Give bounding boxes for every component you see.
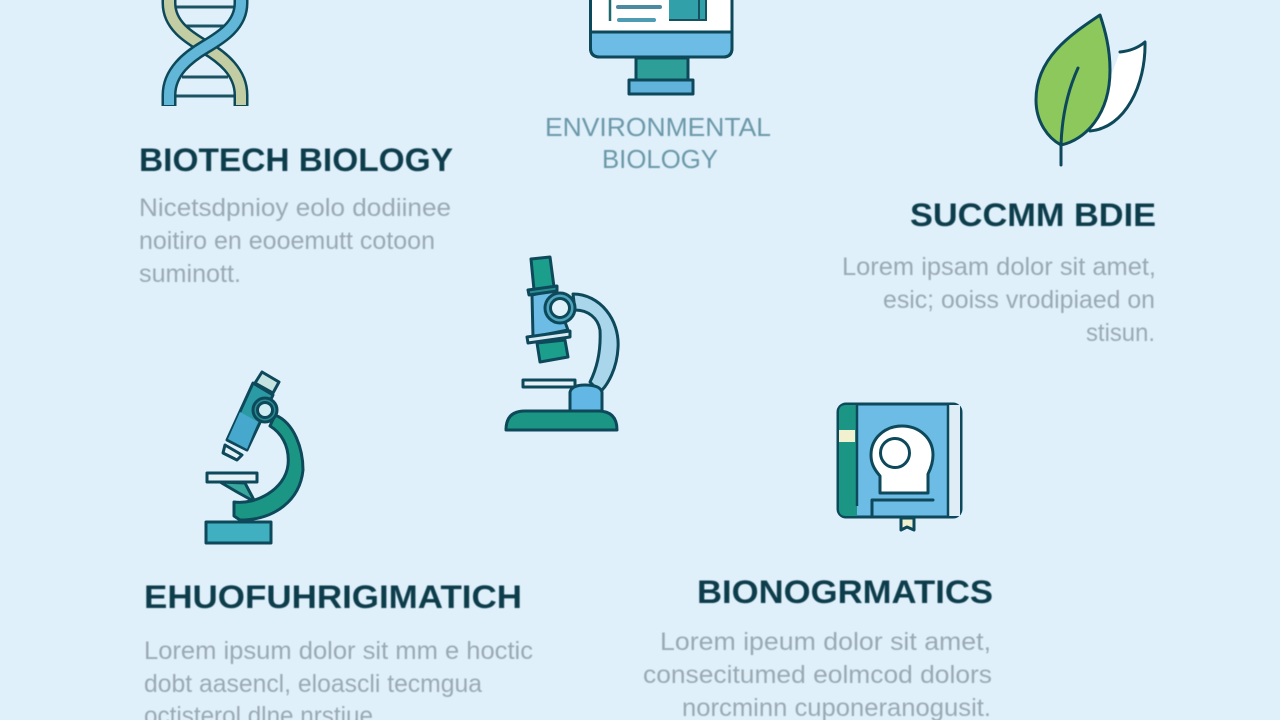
text block: ehuofuhrigimatich description: dobt aasencl, eloascli tecmgua bbox=[144, 670, 482, 698]
text block: succmm description: stisun. bbox=[1086, 319, 1155, 347]
text block: biotech description bbox=[139, 194, 451, 288]
icon: DNA helix bbox=[169, 0, 241, 106]
icon: left microscope bbox=[206, 372, 303, 543]
heading: succmm bdie: SUCCMM BDIE bbox=[910, 197, 1156, 233]
text block: biotech description: suminott. bbox=[139, 260, 241, 288]
icon: centre microscope bbox=[506, 257, 618, 430]
text block: succmm description: esic; ooiss vrodipiaed on bbox=[883, 286, 1155, 314]
text block: bionogrmatics description bbox=[643, 628, 992, 720]
text block: bionogrmatics description: consecitumed eolmcod dolors bbox=[643, 661, 992, 689]
heading: biotech biology: BIOTECH BIOLOGY bbox=[139, 142, 453, 178]
text block: ehuofuhrigimatich description bbox=[144, 637, 533, 720]
text block: bionogrmatics description: Lorem ipeum dolor sit amet, bbox=[660, 628, 991, 656]
icon: leaf bbox=[1036, 15, 1145, 165]
text block: ehuofuhrigimatich description: Lorem ipsum dolor sit mm e hoctic bbox=[144, 637, 533, 665]
heading: environmental biology: BIOLOGY bbox=[602, 144, 718, 174]
heading: environmental biology: ENVIRONMENTAL bbox=[545, 112, 771, 142]
heading: environmental biology bbox=[545, 112, 771, 174]
text block: succmm description: Lorem ipsam dolor sit amet, bbox=[842, 253, 1156, 281]
heading: bionogrmatics: BIONOGRMATICS bbox=[697, 574, 993, 610]
heading: ehuofuhrigimatich: EHUOFUHRIGIMATICH bbox=[144, 579, 522, 615]
icon: computer monitor bbox=[590, 0, 732, 94]
text block: succmm description bbox=[842, 253, 1156, 347]
text block: biotech description: Nicetsdpnioy eolo dodiinee bbox=[139, 194, 451, 222]
text block: biotech description: noitiro en eooemutt cotoon bbox=[139, 227, 435, 255]
icon: book with head bbox=[838, 404, 961, 530]
